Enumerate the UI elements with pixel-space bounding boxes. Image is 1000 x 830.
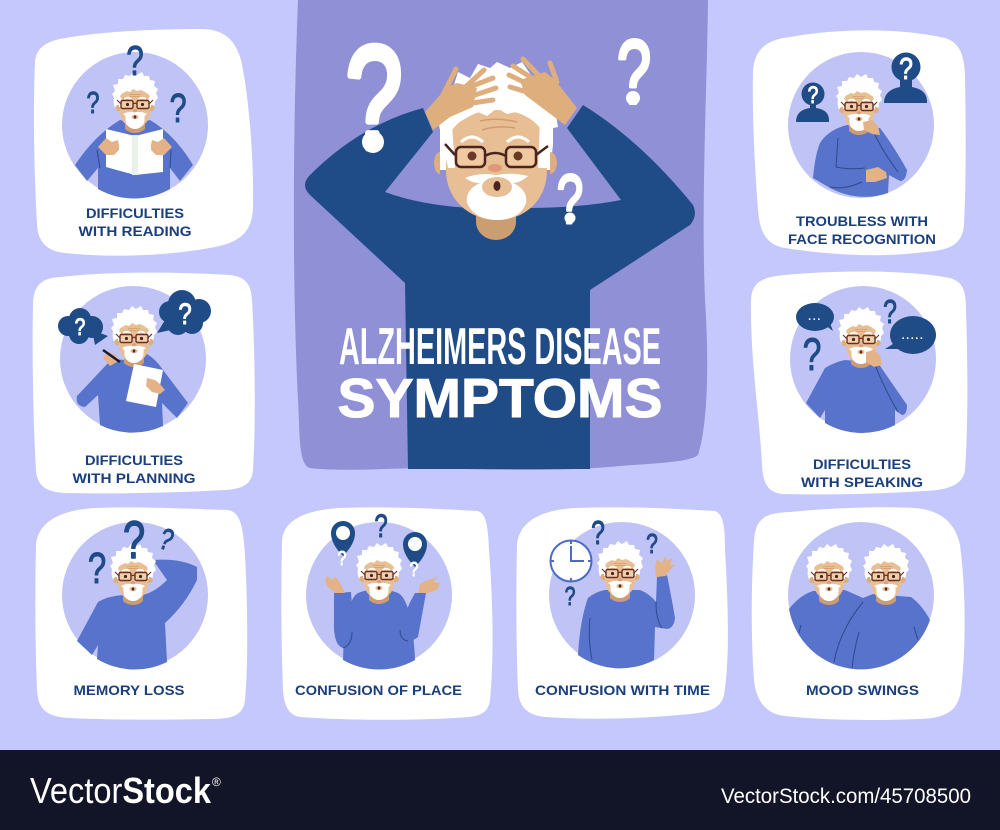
panel: difficulties with reading bbox=[34, 29, 253, 256]
circle bbox=[788, 522, 934, 668]
speech bubble right: ..... bbox=[902, 330, 924, 342]
title bbox=[338, 318, 662, 429]
circle bbox=[549, 522, 695, 668]
question marks: ? bbox=[123, 510, 145, 569]
label: FACE RECOGNITION bbox=[788, 231, 936, 247]
paper bbox=[126, 364, 163, 407]
panel: mood swings bbox=[752, 507, 965, 720]
question marks: ? bbox=[126, 37, 144, 84]
forehead hair bbox=[440, 100, 550, 135]
beard bbox=[465, 174, 528, 220]
right hand bbox=[509, 59, 577, 125]
question marks: ? bbox=[591, 516, 605, 552]
eyebrows bbox=[461, 137, 529, 142]
silhouette right: ? bbox=[899, 51, 913, 86]
circle bbox=[62, 522, 208, 668]
speech bubble right bbox=[885, 316, 936, 354]
question marks bbox=[803, 295, 897, 380]
panel: difficulties with speaking bbox=[751, 272, 967, 494]
title line 2: SYMPTOMS bbox=[338, 367, 662, 429]
book bbox=[106, 129, 163, 175]
figures bbox=[789, 544, 930, 669]
wrinkles bbox=[480, 119, 517, 130]
face bbox=[446, 110, 547, 220]
panel: difficulties with planning bbox=[33, 273, 255, 493]
map pin right: ? bbox=[410, 558, 418, 580]
label bbox=[72, 452, 196, 486]
arm left bbox=[334, 592, 352, 648]
figure bbox=[75, 72, 193, 198]
question mark small: ? bbox=[557, 160, 583, 238]
hero backdrop bbox=[294, 0, 708, 470]
label bbox=[78, 205, 192, 239]
silhouette right bbox=[884, 51, 927, 103]
label: DIFFICULTIES bbox=[86, 205, 184, 221]
speech bubble left: ... bbox=[808, 311, 822, 323]
panel: face recognition bbox=[753, 30, 966, 255]
card bbox=[281, 507, 493, 720]
panel: central hero bbox=[294, 0, 708, 470]
panel: confusion with time bbox=[516, 507, 728, 719]
question marks bbox=[88, 510, 178, 593]
label: CONFUSION OF PLACE bbox=[295, 682, 462, 698]
circle bbox=[62, 52, 208, 198]
watermark bar bbox=[0, 750, 1000, 830]
thought bubble right: ? bbox=[178, 296, 192, 331]
brand: VectorStock bbox=[30, 770, 212, 811]
card bbox=[35, 507, 247, 720]
figure bbox=[325, 543, 440, 669]
clock bbox=[550, 540, 592, 582]
figure bbox=[806, 307, 907, 433]
sweater bbox=[305, 105, 695, 469]
nose bbox=[488, 164, 502, 172]
question marks: ? bbox=[803, 330, 821, 380]
pen bbox=[103, 350, 120, 362]
hands bbox=[863, 120, 887, 182]
card bbox=[752, 507, 965, 720]
speech bubble left bbox=[796, 303, 834, 331]
circle bbox=[306, 522, 452, 668]
label bbox=[788, 213, 936, 247]
hand bbox=[866, 350, 882, 367]
label: WITH READING bbox=[78, 223, 192, 239]
figure bbox=[77, 306, 188, 433]
question marks bbox=[565, 516, 658, 611]
label: TROUBLESS WITH bbox=[796, 213, 928, 229]
question marks: ? bbox=[155, 521, 178, 558]
arm right bbox=[400, 593, 426, 641]
map pin left bbox=[331, 521, 355, 569]
mouth bbox=[494, 181, 500, 191]
panel: memory loss bbox=[35, 507, 247, 720]
hair bbox=[440, 62, 558, 170]
thought bubble left: ? bbox=[75, 313, 85, 341]
label: MOOD SWINGS bbox=[806, 682, 919, 698]
circle bbox=[788, 52, 934, 198]
label: MEMORY LOSS bbox=[74, 682, 184, 698]
map pin left: ? bbox=[338, 547, 346, 569]
hand bbox=[655, 556, 675, 577]
figure bbox=[77, 544, 197, 670]
left hand bbox=[425, 69, 496, 130]
card bbox=[753, 30, 966, 255]
figure bbox=[813, 74, 907, 197]
label: WITH SPEAKING bbox=[801, 474, 923, 490]
mouth area bbox=[482, 177, 512, 197]
silhouette left: ? bbox=[808, 81, 818, 109]
url: VectorStock.com/45708500 bbox=[721, 785, 971, 808]
figure bbox=[578, 541, 675, 668]
card bbox=[516, 507, 728, 719]
question marks: ? bbox=[646, 529, 658, 560]
label bbox=[801, 456, 923, 490]
label: DIFFICULTIES bbox=[813, 456, 911, 472]
thought bubble left bbox=[58, 308, 108, 345]
hand bbox=[103, 352, 165, 394]
question mark large: ? bbox=[346, 16, 402, 179]
question mark: ? bbox=[374, 508, 388, 544]
question marks: ? bbox=[883, 295, 897, 331]
label: CONFUSION WITH TIME bbox=[535, 682, 710, 698]
hands bbox=[325, 576, 440, 593]
silhouette left bbox=[796, 81, 829, 122]
hands bbox=[98, 138, 172, 155]
hero figure bbox=[305, 59, 695, 469]
question mark right: ? bbox=[617, 22, 651, 123]
ears bbox=[434, 152, 557, 174]
torso bbox=[343, 589, 415, 669]
title line 1: ALZHEIMERS DISEASE bbox=[339, 318, 661, 376]
circle bbox=[60, 286, 206, 432]
question marks: ? bbox=[565, 581, 575, 611]
thought bubble right bbox=[157, 290, 211, 335]
label: WITH PLANNING bbox=[72, 470, 196, 486]
question marks: ? bbox=[87, 85, 99, 120]
circle bbox=[790, 286, 936, 432]
registered mark: ® bbox=[212, 775, 221, 789]
card bbox=[34, 29, 253, 256]
label: DIFFICULTIES bbox=[85, 452, 183, 468]
glasses bbox=[445, 144, 548, 167]
question marks: ? bbox=[169, 85, 187, 131]
map pin right bbox=[403, 532, 427, 580]
side hair bbox=[439, 120, 553, 168]
card bbox=[751, 272, 967, 494]
panel: confusion of place bbox=[281, 507, 493, 720]
question marks bbox=[87, 37, 187, 131]
neck bbox=[476, 215, 516, 240]
card bbox=[33, 273, 255, 493]
question marks: ? bbox=[88, 545, 106, 593]
